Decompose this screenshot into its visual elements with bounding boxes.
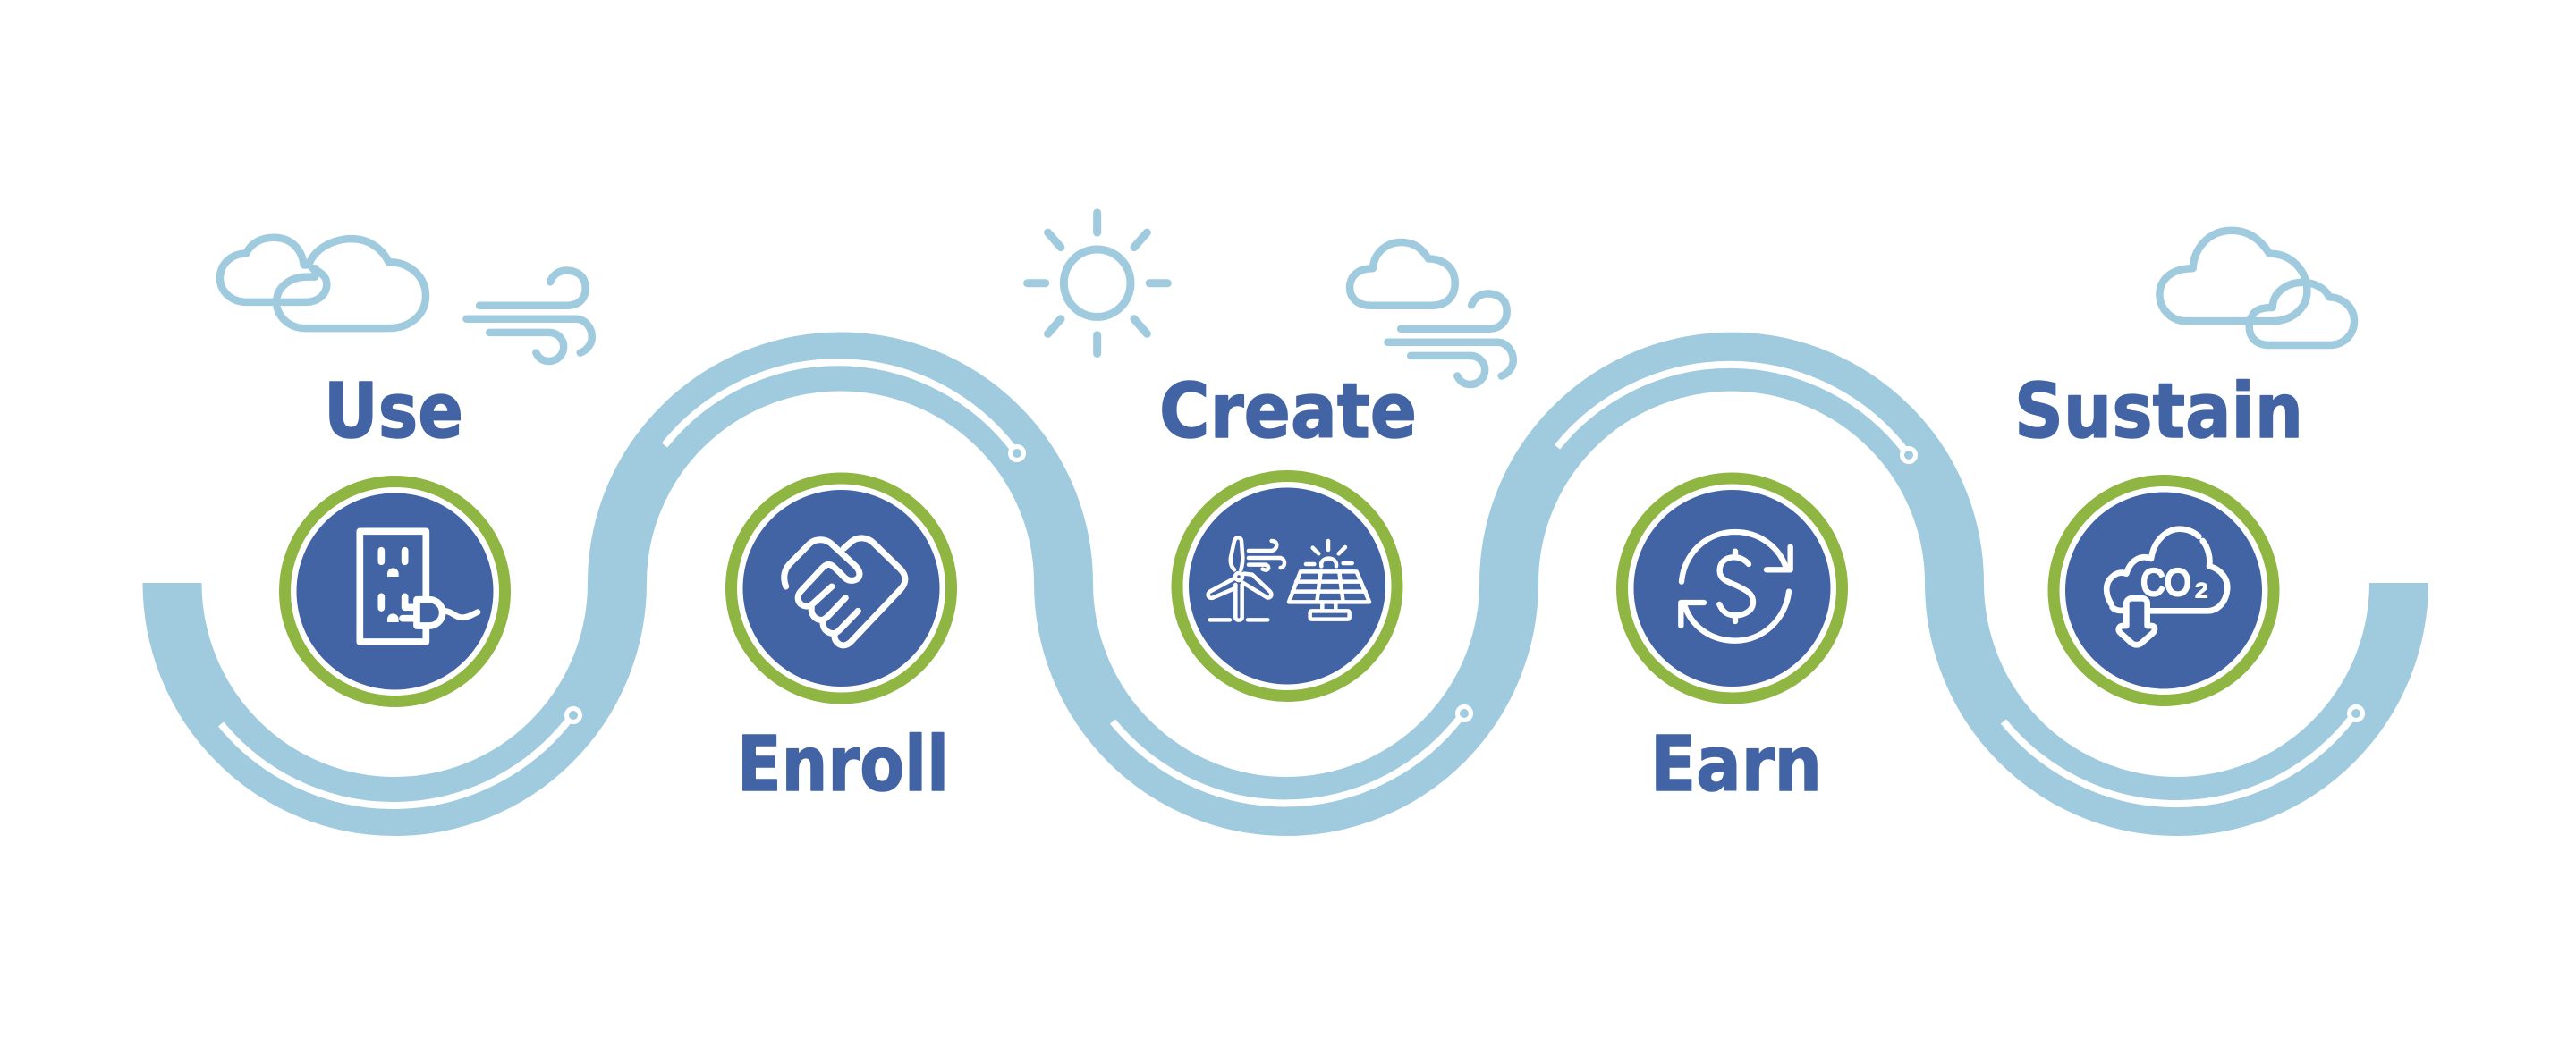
icon: CO2 cloud with down arrow: CO: [2140, 562, 2190, 603]
icon: two clouds top right: [2159, 231, 2354, 345]
icon: CO2 cloud with down arrow: 2: [2195, 578, 2208, 603]
icon: wind left: [466, 271, 592, 361]
badge: Sustain: [2054, 481, 2274, 701]
badge: Use: [284, 481, 504, 701]
badge: Create: [1177, 476, 1397, 696]
heading: Create: Create: [1159, 367, 1417, 456]
heading: Earn: Earn: [1650, 721, 1822, 809]
ribbon arc 3: [1063, 583, 1509, 806]
heading: Use: Use: [324, 367, 463, 456]
heading: Sustain: Sustain: [2014, 367, 2303, 456]
icon: outlet and plug: [360, 531, 478, 642]
winding ribbon path: [172, 362, 2399, 806]
ribbon arc 1: [172, 583, 617, 806]
badge: Earn: [1623, 478, 1843, 698]
ribbon arc 4: [1509, 362, 1954, 583]
icon: handshake: [784, 538, 905, 645]
icon: two clouds top left: [220, 238, 426, 328]
icon: CO2 cloud with down arrow: [2106, 529, 2227, 645]
ribbon arc 2: [617, 362, 1063, 583]
heading: Enroll: Enroll: [737, 721, 949, 809]
ribbon arc 5: [1954, 583, 2399, 806]
icon: dollar with circular arrows: [1681, 532, 1791, 641]
icon: cloud centre: [1350, 242, 1455, 306]
icon: wind centre: [1387, 294, 1513, 384]
badge: Enroll: [732, 478, 952, 698]
icon: sun: [1028, 213, 1167, 353]
icon: wind turbine and solar panel: [1208, 537, 1369, 620]
